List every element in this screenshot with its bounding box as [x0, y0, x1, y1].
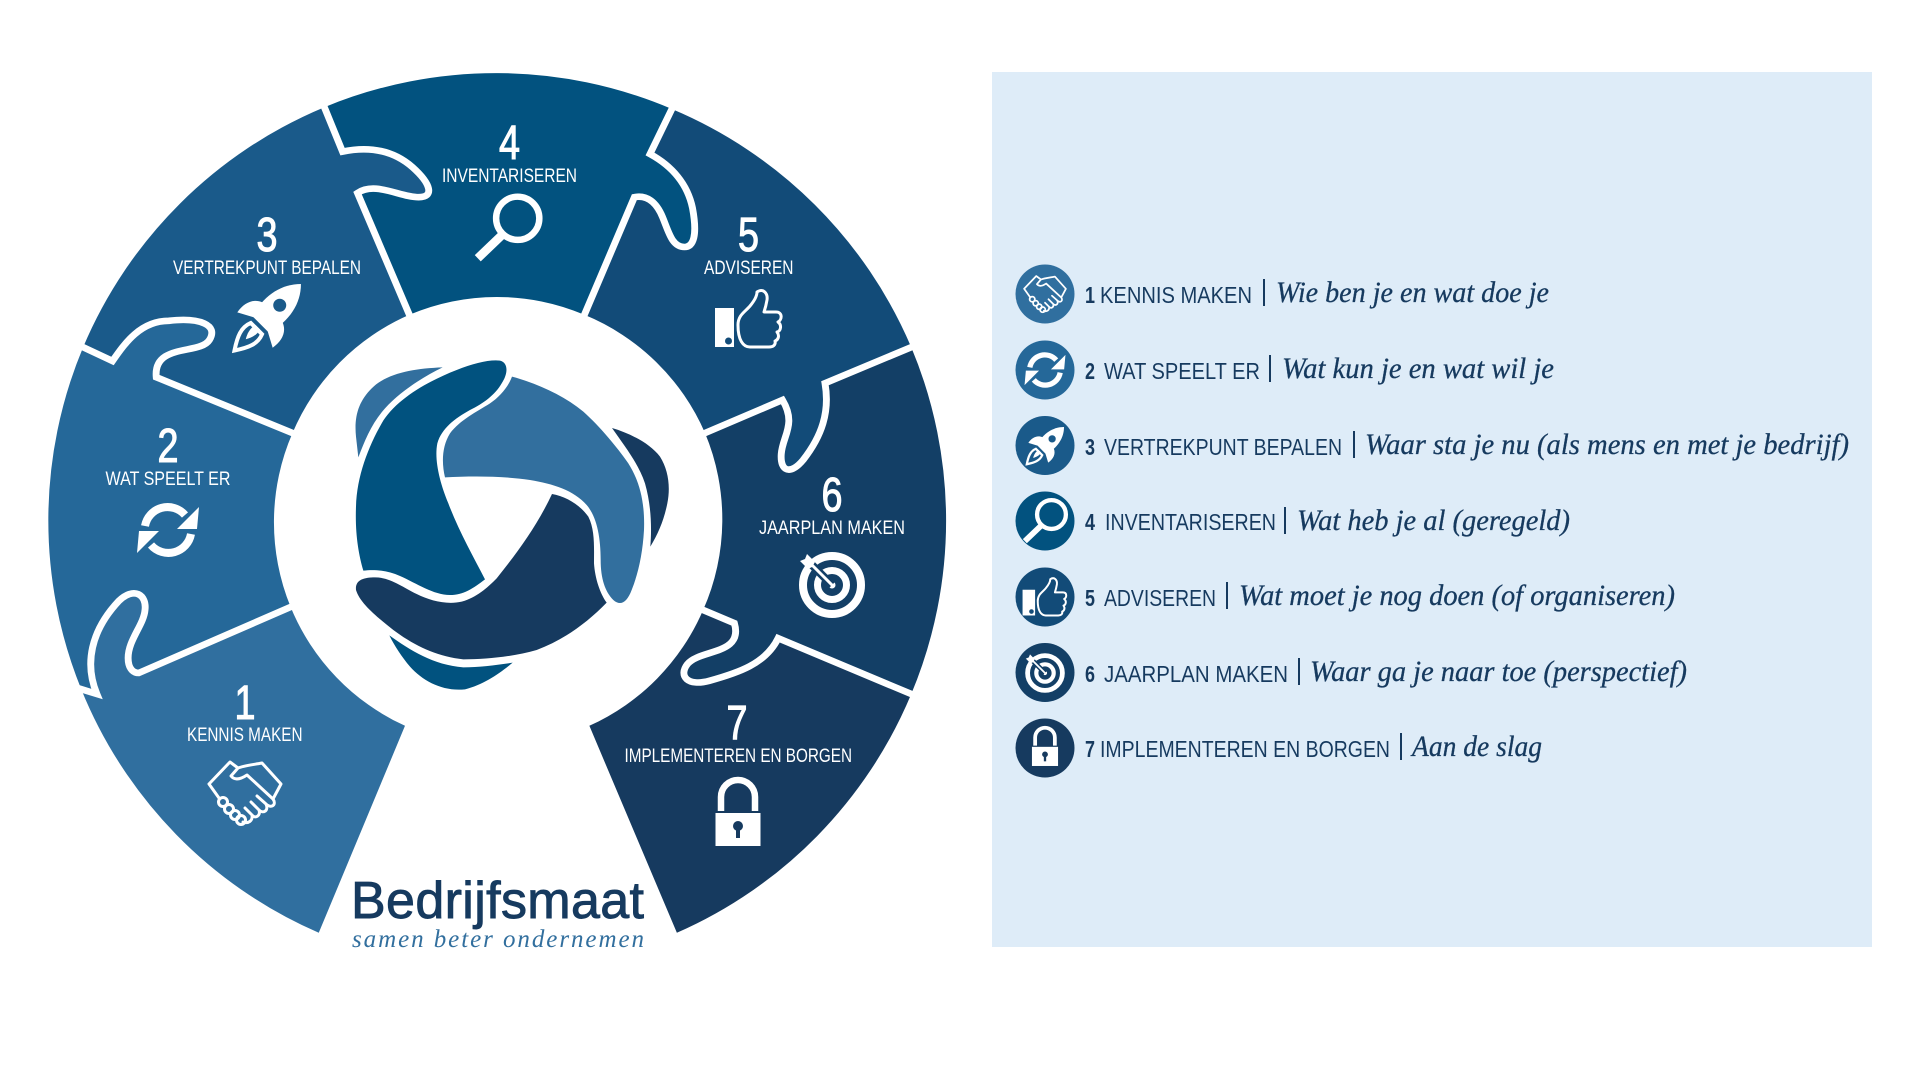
number 7: 7 [1085, 736, 1095, 762]
number 2: 2 [158, 420, 178, 473]
number 3: 3 [1085, 434, 1095, 460]
legend row 1 [1016, 264, 1549, 324]
question 5: Wat moet je nog doen (of organiseren) [1239, 579, 1675, 612]
legend row 4 [1016, 492, 1570, 550]
segment 4: inventariseren [324, 73, 695, 315]
wedge 6 [684, 347, 946, 694]
label 4: INVENTARISEREN [442, 166, 577, 187]
brand name: Bedrijfsmaat [351, 872, 645, 930]
icon badge 1 [1016, 264, 1074, 324]
segment 2: wat speelt er [48, 320, 293, 694]
legend list [1016, 264, 1849, 778]
wedge 7 [589, 610, 911, 933]
segment 1: kennis maken [81, 593, 405, 933]
question 4: Wat heb je al (geregeld) [1297, 504, 1570, 537]
number 4: 4 [1085, 509, 1095, 535]
number 5: 5 [1085, 585, 1095, 611]
segment 7: implementeren en borgen [589, 610, 911, 933]
label 1: KENNIS MAKEN [187, 725, 302, 746]
icon: refresh arrows [137, 507, 199, 553]
legend row 2 [1016, 340, 1554, 400]
number 1: 1 [1085, 282, 1095, 308]
segment 6: jaarplan maken [684, 347, 946, 694]
brand tagline: samen beter ondernemen [352, 926, 644, 953]
icon: thumbs up [715, 291, 781, 347]
heading 1: KENNIS MAKEN [1100, 282, 1252, 308]
heading 4: INVENTARISEREN [1105, 509, 1276, 535]
question 3: Waar sta je nu (als mens en met je bedrijf) [1365, 428, 1849, 461]
label 2: WAT SPEELT ER [106, 469, 230, 490]
centre logo mark [356, 360, 669, 690]
label 6: JAARPLAN MAKEN [759, 518, 905, 539]
heading 7: IMPLEMENTEREN EN BORGEN [1100, 736, 1390, 762]
heading 5: ADVISEREN [1104, 585, 1216, 611]
label 3: VERTREKPUNT BEPALEN [173, 258, 361, 279]
icon: rocket [216, 266, 319, 369]
number 7: 7 [726, 697, 748, 750]
icon badge 3 [1016, 416, 1074, 475]
panel: light blue background [992, 72, 1872, 947]
wedge 2 [48, 320, 293, 694]
legend row 3 [1016, 416, 1849, 475]
icon: magnifier [478, 197, 539, 258]
icon badge 5 [1016, 568, 1074, 626]
segment 3: vertrekpunt bepalen [83, 107, 429, 433]
question 7: Aan de slag [1410, 730, 1542, 763]
icon: padlock [716, 780, 760, 846]
number 6: 6 [1085, 661, 1095, 687]
legend row 5 [1016, 568, 1675, 626]
number 5: 5 [738, 209, 759, 262]
label 7: IMPLEMENTEREN EN BORGEN [624, 746, 852, 767]
label 5: ADVISEREN [704, 258, 794, 279]
icon badge 7 [1016, 718, 1074, 778]
number 1: 1 [234, 677, 256, 730]
wedge 5 [584, 109, 911, 470]
number 6: 6 [822, 469, 842, 522]
heading 6: JAARPLAN MAKEN [1104, 661, 1288, 687]
number 4: 4 [499, 117, 520, 170]
wedge 1 [81, 593, 405, 933]
icon badge 6 [1016, 643, 1074, 702]
heading 3: VERTREKPUNT BEPALEN [1104, 434, 1342, 460]
question 2: Wat kun je en wat wil je [1282, 352, 1554, 385]
wedge 4 [324, 73, 695, 315]
icon badge 2 [1016, 340, 1074, 400]
number 3: 3 [256, 209, 278, 262]
icon badge 4 [1016, 492, 1074, 550]
icon: handshake [209, 762, 281, 824]
legend row 7 [1016, 718, 1542, 778]
question 6: Waar ga je naar toe (perspectief) [1310, 655, 1687, 688]
segment 5: adviseren [584, 109, 911, 470]
wedge 3 [83, 107, 429, 433]
question 1: Wie ben je en wat doe je [1276, 276, 1549, 309]
number 2: 2 [1085, 358, 1095, 384]
legend row 6 [1016, 643, 1687, 702]
icon: target [800, 554, 861, 614]
segmented wheel [48, 73, 946, 933]
heading 2: WAT SPEELT ER [1104, 358, 1260, 384]
